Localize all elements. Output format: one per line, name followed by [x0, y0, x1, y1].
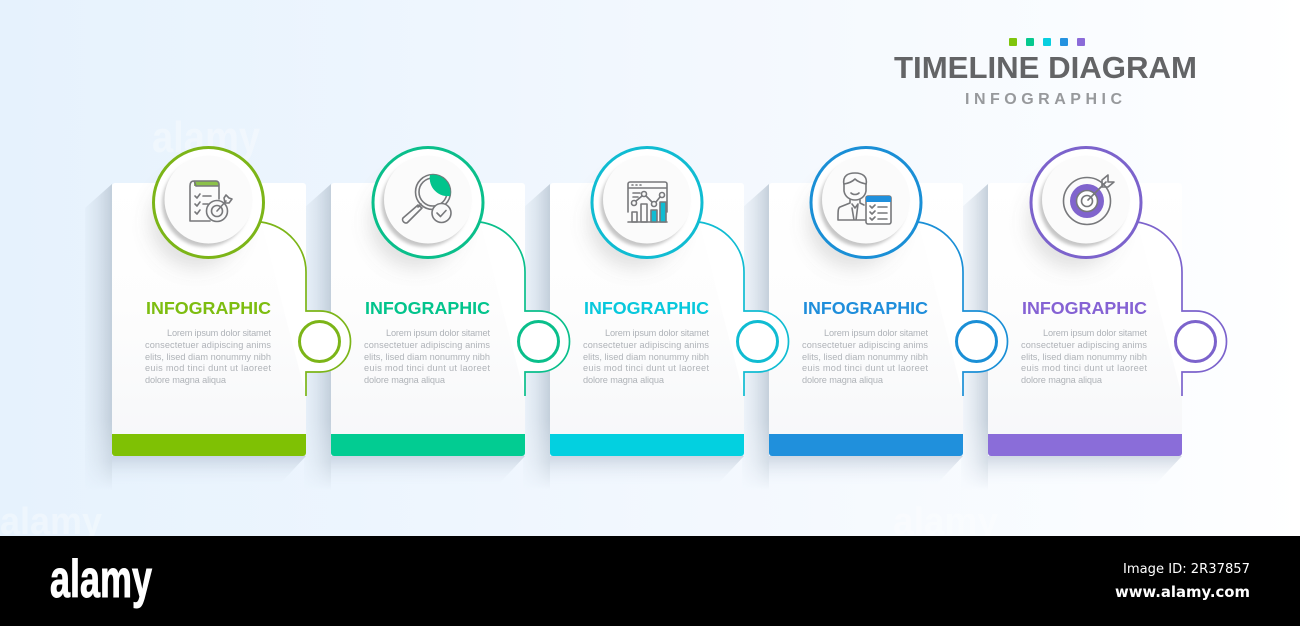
icon: checklist with target [190, 181, 232, 222]
body text: consectetuer adipiscing anims [583, 340, 709, 350]
body text: dolore magna aliqua [583, 375, 665, 385]
panel: step 3 cyan [523, 148, 788, 490]
body text: dolore magna aliqua [1021, 375, 1103, 385]
card shadow [523, 184, 744, 490]
card shadow [85, 184, 306, 490]
body text: Lorem ipsum dolor sitamet [1043, 328, 1147, 338]
watermarks [0, 113, 998, 543]
body text: consectetuer adipiscing anims [1021, 340, 1147, 350]
body text: consectetuer adipiscing anims [364, 340, 490, 350]
panel: step 5 purple [961, 148, 1226, 490]
body text: euis mod tinci dunt ut laoreet [583, 363, 709, 373]
body text [364, 328, 490, 385]
connector [480, 222, 570, 396]
card [988, 183, 1182, 456]
card shadow [304, 184, 525, 490]
body text: dolore magna aliqua [364, 375, 446, 385]
body text: Lorem ipsum dolor sitamet [824, 328, 928, 338]
panel: step 2 teal [304, 148, 570, 490]
card shadow [742, 184, 963, 490]
body text: Lorem ipsum dolor sitamet [605, 328, 709, 338]
title: TIMELINE DIAGRAM [894, 50, 1197, 85]
body text: Lorem ipsum dolor sitamet [167, 328, 271, 338]
connector ring [518, 322, 558, 362]
body text: elits, lised diam nonummy nibh [583, 352, 709, 362]
icon circle [150, 148, 264, 268]
icon circle [1028, 148, 1141, 268]
panel: step 1 green [85, 148, 350, 490]
colour bar [988, 434, 1182, 456]
body text: euis mod tinci dunt ut laoreet [145, 363, 271, 373]
body text: euis mod tinci dunt ut laoreet [1021, 363, 1147, 373]
body text [802, 328, 928, 385]
connector ring [738, 322, 778, 362]
card [331, 183, 525, 456]
connector [261, 222, 350, 396]
heading: INFOGRAPHIC [584, 298, 709, 318]
colour squares [1009, 38, 1085, 46]
body text: consectetuer adipiscing anims [145, 340, 271, 350]
body text: euis mod tinci dunt ut laoreet [364, 363, 490, 373]
body text [1021, 328, 1147, 385]
connector ring [956, 322, 996, 362]
colour bar [769, 434, 963, 456]
site url: www.alamy.com [1115, 583, 1250, 601]
body text: dolore magna aliqua [802, 375, 884, 385]
body text: elits, lised diam nonummy nibh [145, 352, 271, 362]
watermarks: alamy [893, 501, 998, 543]
logo: alamy [50, 550, 152, 609]
body text: elits, lised diam nonummy nibh [802, 352, 928, 362]
connector [918, 222, 1008, 396]
watermarks: alamy [0, 501, 102, 543]
card shadow [961, 184, 1182, 490]
body text [583, 328, 709, 385]
icon: magnifier with check [403, 174, 451, 223]
subtitle: INFOGRAPHIC [965, 91, 1122, 108]
panel: step 4 blue [742, 148, 1008, 490]
heading: INFOGRAPHIC [365, 298, 490, 318]
heading: INFOGRAPHIC [803, 298, 928, 318]
connector ring [300, 322, 340, 362]
title block [894, 38, 1197, 108]
card [112, 183, 306, 456]
icon: person with checklist [838, 173, 891, 224]
colour bar [550, 434, 744, 456]
colour bar [331, 434, 525, 456]
body text: consectetuer adipiscing anims [802, 340, 928, 350]
body text: dolore magna aliqua [145, 375, 227, 385]
body text: euis mod tinci dunt ut laoreet [802, 363, 928, 373]
image id: Image ID: 2R37857 [1123, 562, 1250, 577]
footer bar [0, 536, 1300, 626]
heading: INFOGRAPHIC [1022, 298, 1147, 318]
body text [145, 328, 271, 385]
watermarks: alamy [152, 113, 260, 162]
icon circle [588, 148, 702, 268]
card [769, 183, 963, 456]
connector [699, 222, 788, 396]
icon: analytics window [628, 182, 667, 222]
colour bar [112, 434, 306, 456]
icon circle [370, 148, 483, 268]
heading: INFOGRAPHIC [146, 298, 271, 318]
icon: target with arrow [1064, 175, 1114, 224]
card [550, 183, 744, 456]
connector ring [1176, 322, 1216, 362]
body text: Lorem ipsum dolor sitamet [386, 328, 490, 338]
body text: elits, lised diam nonummy nibh [1021, 352, 1147, 362]
connector [1137, 222, 1226, 396]
body text: elits, lised diam nonummy nibh [364, 352, 490, 362]
icon circle [808, 148, 921, 268]
